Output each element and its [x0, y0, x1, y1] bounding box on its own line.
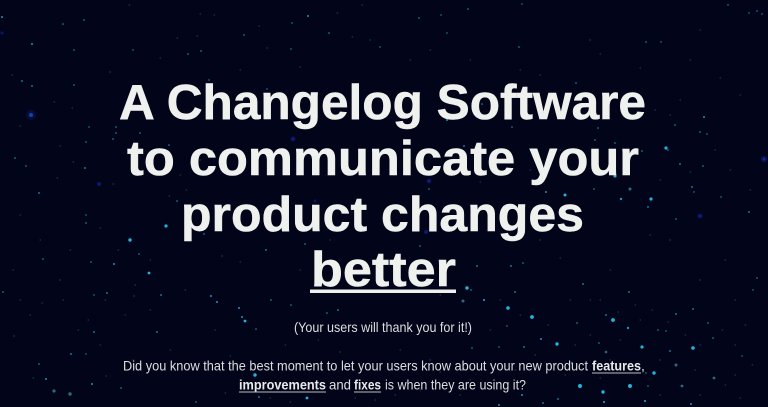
- description paragraph: and: [329, 376, 351, 392]
- description paragraph: [123, 358, 645, 392]
- description paragraph: fixes: [354, 376, 381, 392]
- title: to communicate your: [127, 132, 639, 186]
- description paragraph: Did you know that the best moment to let your users know about your new product: [123, 358, 588, 374]
- description paragraph: ,: [641, 358, 645, 374]
- tagline: (Your users will thank you for it!): [294, 319, 472, 335]
- description paragraph: improvements: [239, 376, 326, 392]
- description paragraph: is when they are using it?: [385, 376, 526, 392]
- description paragraph: features: [592, 358, 641, 374]
- title: product changes: [181, 188, 584, 242]
- title: A Changelog Software: [119, 76, 646, 130]
- title: [119, 76, 646, 297]
- title: better: [311, 243, 456, 297]
